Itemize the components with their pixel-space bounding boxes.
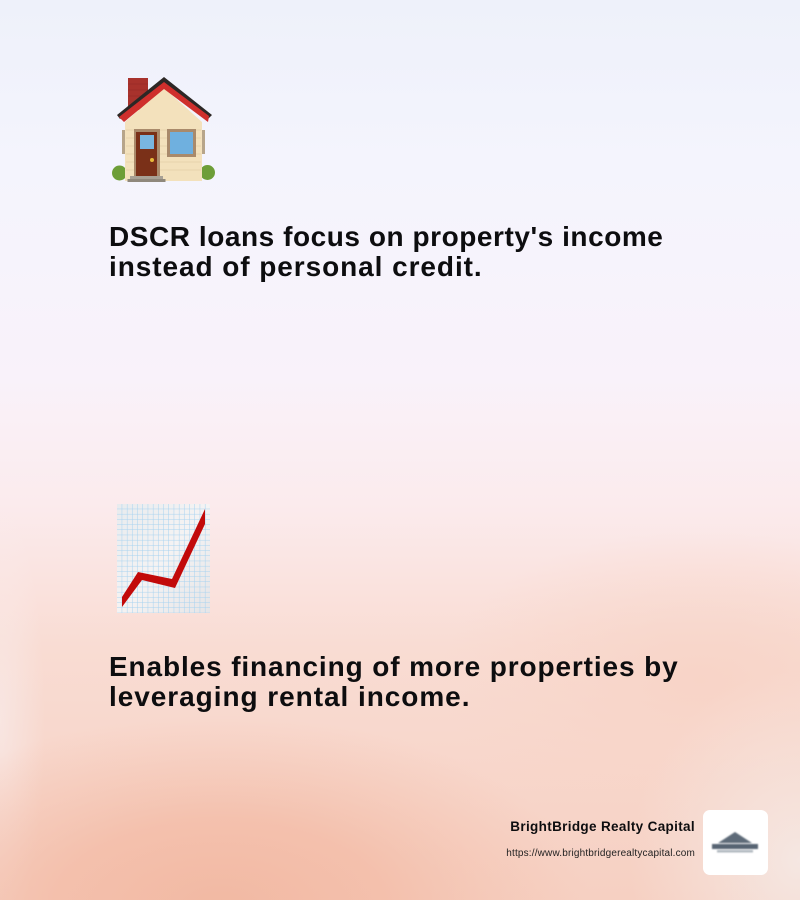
heading: financing: leveraging rental income. bbox=[109, 681, 470, 712]
heading: DSCR loans bbox=[109, 221, 663, 282]
window bbox=[167, 129, 196, 157]
heading: DSCR loans: DSCR loans focus on property's income bbox=[109, 221, 663, 252]
steps bbox=[128, 176, 166, 182]
bushes bbox=[112, 165, 215, 180]
logo card bbox=[703, 810, 768, 875]
footer brand bbox=[506, 810, 768, 875]
heading: financing: Enables financing of more properties by bbox=[109, 651, 679, 682]
chart paper bbox=[117, 504, 210, 613]
house walls bbox=[125, 88, 202, 181]
chimney bbox=[128, 78, 148, 110]
icon: house bbox=[112, 77, 215, 182]
roof bbox=[117, 77, 212, 122]
brand name: BrightBridge Realty Capital bbox=[510, 819, 695, 834]
logo mark bbox=[711, 831, 759, 854]
icon: rising chart bbox=[117, 504, 210, 613]
chart line bbox=[122, 509, 205, 607]
shutters bbox=[122, 130, 205, 154]
heading: DSCR loans: instead of personal credit. bbox=[109, 251, 483, 282]
door bbox=[134, 129, 160, 176]
heading: financing bbox=[109, 651, 679, 712]
website url: https://www.brightbridgerealtycapital.com bbox=[506, 848, 695, 859]
